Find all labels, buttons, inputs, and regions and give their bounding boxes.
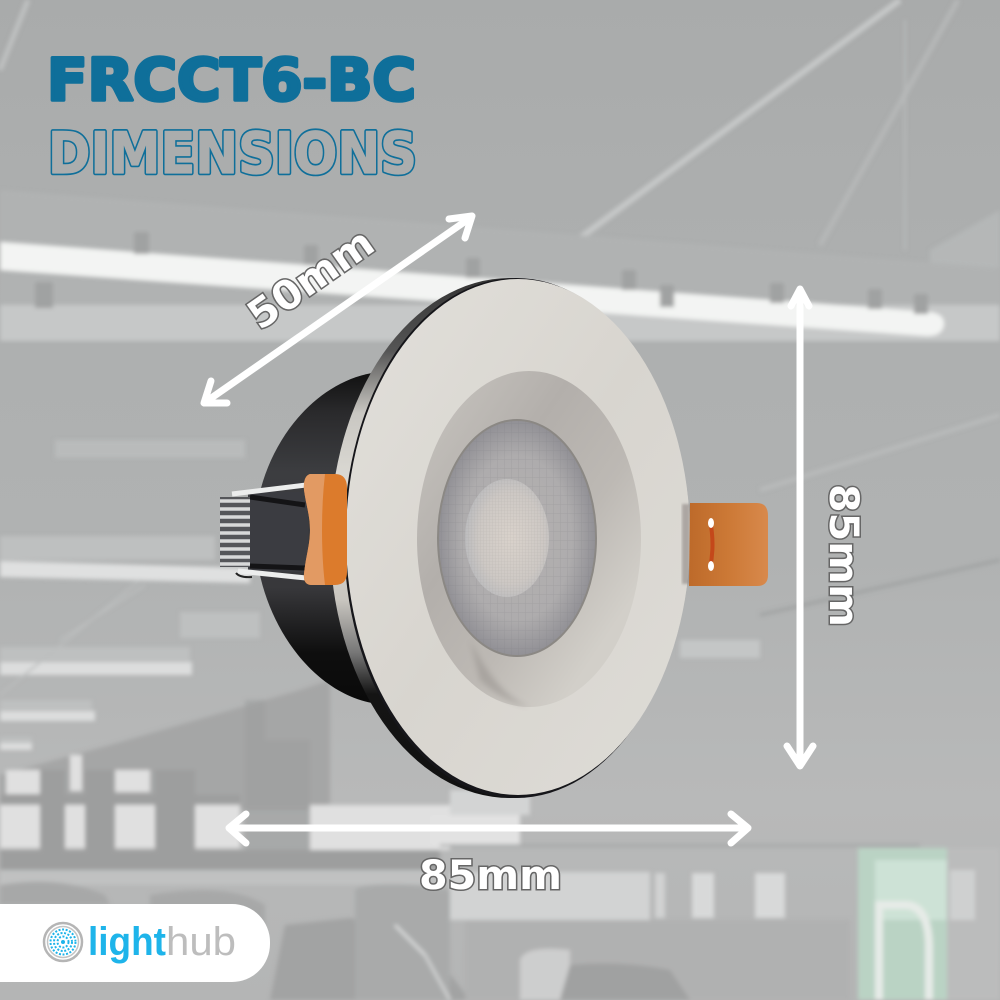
logo icon — [44, 923, 82, 961]
dimension arrow: 85mm height — [787, 289, 813, 766]
product: recessed downlight — [220, 278, 768, 798]
ceiling trunking band — [0, 190, 1000, 305]
darker columns — [0, 700, 920, 880]
label: 85mm horizontal: 85mm — [419, 853, 562, 899]
dimension arrow: 50mm depth — [204, 216, 472, 403]
metal bezel rim — [330, 278, 690, 798]
mounting brackets — [35, 232, 928, 314]
spring coil — [220, 497, 250, 567]
logo wordmark: hub — [166, 920, 236, 964]
label: 50mm: 50mm — [239, 219, 383, 339]
left spring clip — [220, 485, 308, 578]
black rear housing — [255, 373, 372, 703]
lower bands and lit panels — [0, 870, 785, 920]
logo wordmark: light — [88, 920, 166, 964]
orange clip tab, right — [689, 503, 768, 586]
label: 85mm vertical: 85mm — [820, 484, 866, 627]
subtitle: DIMENSIONS outlined: DIMENSIONS — [48, 121, 417, 187]
logo badge: lighthub — [0, 904, 270, 982]
parked cars — [0, 882, 850, 1000]
green exit sign panel — [858, 848, 1000, 1000]
recessed inner ring — [417, 371, 641, 707]
subtitle: DIMENSIONS outlined: DIMENSIONS — [48, 121, 417, 187]
brushed nickel front face — [346, 279, 690, 795]
logo wordmark — [88, 920, 236, 964]
linear light fitting — [0, 242, 944, 336]
title: FRCCT6-BC: FRCCT6-BC — [47, 46, 416, 114]
ceiling beams — [0, 0, 1000, 300]
bright gaps between columns — [0, 755, 530, 850]
mid-distance lights — [0, 415, 1000, 750]
sloped ramp shadow — [0, 680, 330, 810]
orange clip tab, left — [304, 474, 347, 585]
horizontal pale band — [0, 305, 1000, 341]
black shadow edge of bezel — [344, 278, 688, 798]
dimension arrow: 85mm width — [229, 814, 748, 843]
shadow under right tab — [682, 504, 690, 584]
LED lens — [437, 419, 597, 657]
